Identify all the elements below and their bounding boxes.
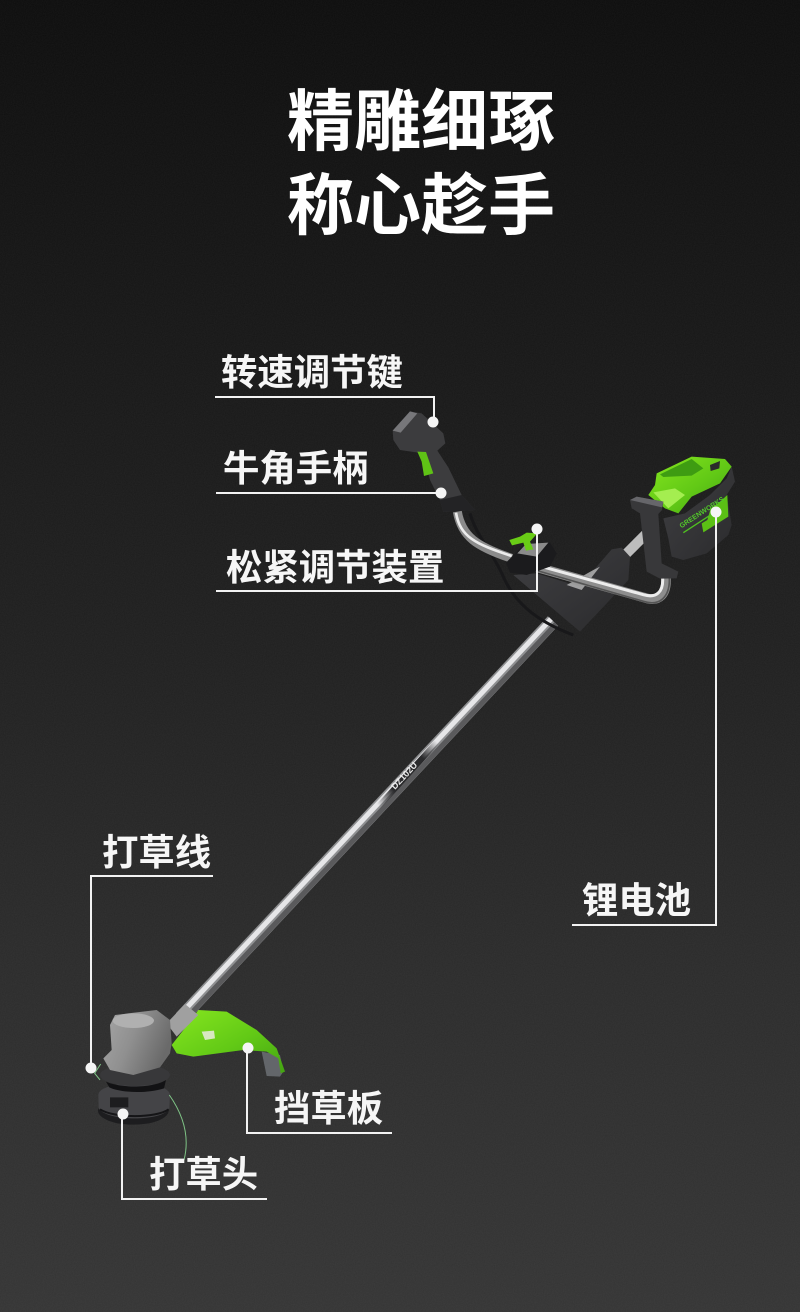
label: trimmer head [118,1108,267,1199]
clamp knob [509,533,537,551]
title: 精雕细琢 [287,85,555,160]
title: 称心趁手 [287,169,555,244]
brand text: GREENWORKS [679,496,726,530]
dark housing [513,548,630,632]
clamp [506,543,557,575]
rear tube [625,533,647,555]
label: bull horn handle [216,448,446,498]
control cable [470,513,573,635]
trimmer head and guard [95,1004,285,1160]
label: speed key [215,352,438,428]
battery green cover [648,457,732,513]
title [287,85,555,244]
battery body [663,467,735,560]
main crossbar tube [535,567,666,599]
spool [98,1064,170,1125]
label: lithium battery [572,506,722,925]
label: trimmer head: 打草头 [149,1154,258,1195]
trigger [417,452,433,476]
label: trimmer line [86,832,213,1074]
label: trimmer line: 打草线 [102,832,211,873]
right grip [630,497,678,579]
guard underside [262,1052,283,1077]
lower shaft sleeve [167,1004,198,1037]
illustration: grass trimmer [95,411,735,1160]
label: speed key: 转速调节键 [221,352,403,393]
grass guard [172,1010,285,1073]
handlebar assembly [393,411,669,635]
label: bull horn handle: 牛角手柄 [223,448,369,489]
label: grass guard [242,1042,392,1133]
left handlebar tube [457,512,512,558]
trimmer shaft [179,619,556,1021]
battery green side [702,495,728,532]
battery [648,457,735,560]
label: tightening device: 松紧调节装置 [226,547,444,588]
trimmer shaft: DZ102U [389,760,419,791]
label: grass guard: 挡草板 [274,1088,383,1129]
gearbox [103,1010,172,1075]
label: tightening device [216,524,542,591]
left grip [393,411,475,512]
label: lithium battery: 锂电池 [582,880,691,921]
trimmer line [95,1064,186,1160]
